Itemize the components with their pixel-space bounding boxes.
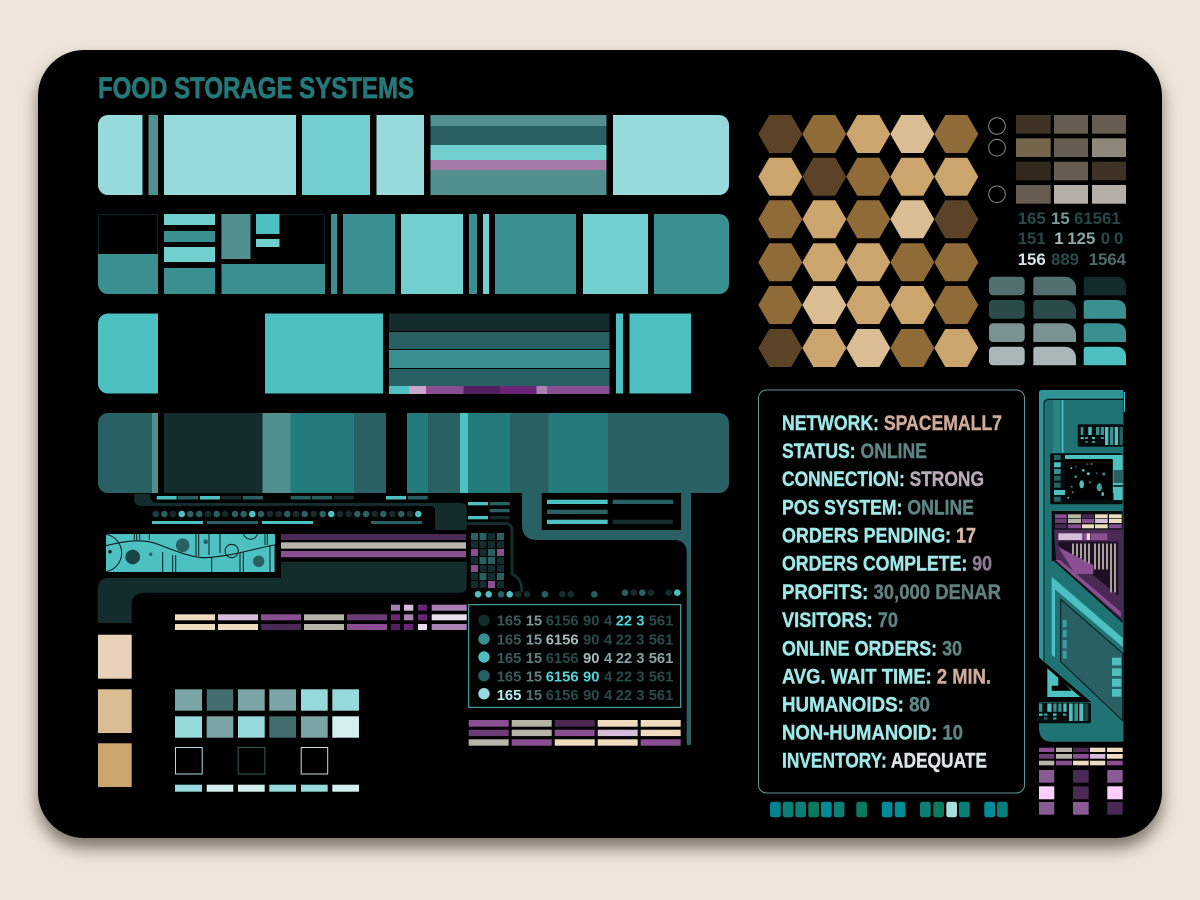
number table: 4 <box>604 614 613 630</box>
outlined squares <box>176 748 328 774</box>
purple bars under device <box>1039 748 1123 765</box>
pill indicator row <box>770 802 1008 817</box>
number readout: 151 <box>1018 229 1046 248</box>
number readout: 15 <box>1051 209 1070 228</box>
small bar cluster <box>468 502 510 519</box>
panel: network status: ORDERS COMPLETE: 90 <box>782 552 992 576</box>
purple and cream bars upper left <box>175 605 467 630</box>
teal frame upper right of lower block <box>522 493 691 745</box>
panel: network status: CONNECTION: STRONG <box>782 467 984 491</box>
number table: 90 <box>583 688 599 704</box>
number readout: 156 <box>1018 250 1046 269</box>
number table: 3 <box>636 632 645 648</box>
number table: 90 <box>583 614 599 630</box>
number readout: 0 <box>1114 229 1123 248</box>
number table: 15 <box>526 614 542 630</box>
purple and cream bars under table <box>469 720 681 746</box>
starfield box <box>1050 453 1123 504</box>
panel: network status: POS SYSTEM: ONLINE <box>782 496 974 520</box>
number readout <box>1018 209 1127 269</box>
number table: 90 <box>583 670 599 686</box>
purple squares <box>1039 770 1123 815</box>
number readout: 165 <box>1018 209 1046 228</box>
number table: 6156 <box>546 670 579 686</box>
bottom swatch bars <box>175 785 359 792</box>
number table: 22 <box>616 670 632 686</box>
panel: network status: ONLINE ORDERS: 30 <box>782 637 962 661</box>
upper control box <box>1078 424 1124 447</box>
number table: 561 <box>649 632 673 648</box>
panel: storage row 2 <box>98 214 729 294</box>
panel: storage row 4 <box>98 413 729 493</box>
light triangle <box>1047 668 1081 697</box>
number table: 165 <box>497 688 521 704</box>
hexagon grid <box>758 115 978 367</box>
cell grid <box>471 533 504 588</box>
number readout: 889 <box>1051 250 1079 269</box>
number table: 165 <box>497 614 521 630</box>
inset small markers <box>1063 620 1067 659</box>
inset right markers <box>1112 658 1121 697</box>
panel: network status: ORDERS PENDING: 17 <box>782 524 976 548</box>
rounded control blocks <box>989 277 1126 365</box>
outlined circles <box>989 118 1005 203</box>
panel: network status: AVG. WAIT TIME: 2 MIN. <box>782 665 991 689</box>
panel: network status: INVENTORY: ADEQUATE <box>782 749 987 773</box>
panel: storage row 1 <box>98 115 729 195</box>
number table: 4 <box>604 632 613 648</box>
number table: 4 <box>604 670 613 686</box>
light angled band <box>1052 577 1123 657</box>
device body <box>1039 390 1124 742</box>
number table: 15 <box>526 670 542 686</box>
number table: 6156 <box>546 651 579 667</box>
number table: 165 <box>497 670 521 686</box>
number readout: 0 <box>1101 229 1110 248</box>
number readout: 61561 <box>1074 209 1121 228</box>
purple bars beside schematic <box>281 534 466 557</box>
title: FOOD STORAGE SYSTEMS <box>98 72 414 105</box>
triangle notch <box>1052 677 1072 691</box>
panel: network status: NON-HUMANOID: 10 <box>782 721 963 745</box>
number table: 6156 <box>546 688 579 704</box>
indicator dots above table <box>475 589 681 598</box>
number readout: 1564 <box>1089 250 1127 269</box>
framed bars <box>547 500 673 524</box>
number table: 3 <box>636 688 645 704</box>
number table: 561 <box>649 614 673 630</box>
number table: 165 <box>497 632 521 648</box>
number table: 561 <box>649 651 673 667</box>
number table: 4 <box>604 651 613 667</box>
status strip bars lower <box>152 521 422 524</box>
number table: 22 <box>616 688 632 704</box>
number table: 15 <box>526 688 542 704</box>
number table: 6156 <box>546 632 579 648</box>
lower control box <box>1037 703 1091 723</box>
tan colour blocks <box>98 635 132 787</box>
inset panel <box>1061 599 1123 721</box>
number table: 6156 <box>546 614 579 630</box>
black diagonal gap <box>1036 656 1091 702</box>
number table: 22 <box>616 651 632 667</box>
number table: 15 <box>526 651 542 667</box>
number readout: 125 <box>1067 229 1095 248</box>
panel: storage row 3 <box>98 314 691 394</box>
number table: 15 <box>526 632 542 648</box>
panel: network status: NETWORK: SPACEMALL7 <box>782 411 1002 435</box>
number table: 90 <box>583 632 599 648</box>
number table <box>469 605 681 707</box>
number readout: 1 <box>1054 229 1064 248</box>
number table: 561 <box>649 688 673 704</box>
number table: 3 <box>636 651 645 667</box>
panel: network status: PROFITS: 30,000 DENAR <box>782 580 1001 604</box>
device schematic <box>1036 390 1125 742</box>
panel: network status: VISITORS: 70 <box>782 608 898 632</box>
wavy schematic panel <box>106 534 275 572</box>
panel: network status <box>758 390 1024 793</box>
number table: 90 <box>583 651 599 667</box>
number table: 165 <box>497 651 521 667</box>
teal swatch grid <box>175 689 359 738</box>
number table: 22 <box>616 614 632 630</box>
panel: network status: HUMANOIDS: 80 <box>782 693 930 717</box>
panel: network status: STATUS: ONLINE <box>782 439 927 463</box>
number table: 22 <box>616 632 632 648</box>
status strip bars top <box>157 496 428 500</box>
number table: 561 <box>649 670 673 686</box>
indicator dot row <box>152 511 422 517</box>
dark frame shapes <box>98 494 522 623</box>
number table: 4 <box>604 688 613 704</box>
number table: 3 <box>636 614 645 630</box>
number table: 3 <box>636 670 645 686</box>
brown swatch grid <box>1016 115 1126 204</box>
purple control panel <box>1052 511 1123 623</box>
